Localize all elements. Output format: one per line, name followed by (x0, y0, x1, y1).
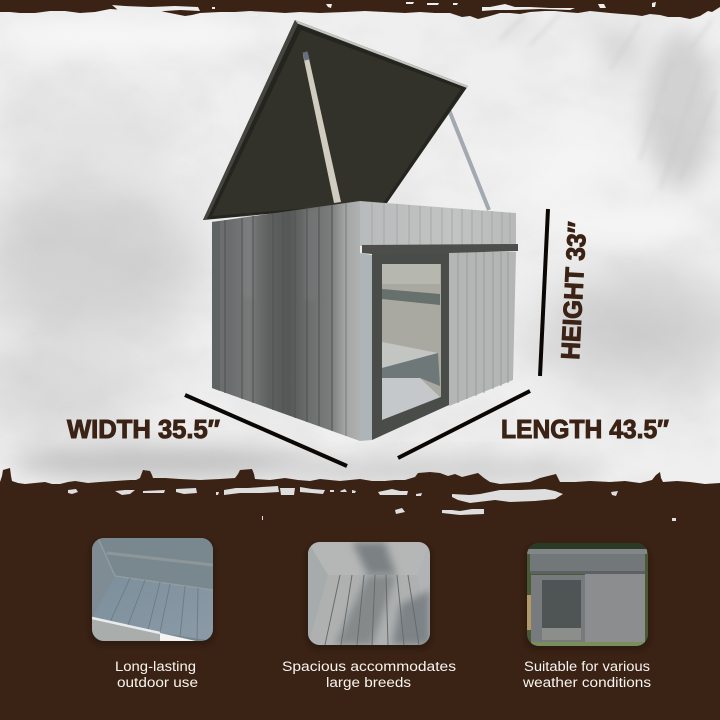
length label: LENGTH 43.5″ (501, 414, 669, 444)
caption 3: weather conditions (522, 675, 651, 690)
thumbnail 3 shadow (525, 545, 650, 650)
thumbnail 2 shadow (306, 544, 432, 649)
white torn specks, bottom (68, 486, 676, 521)
caption 2: large breeds (326, 675, 411, 690)
torn brown top border (0, 0, 720, 19)
white torn specks, top (112, 2, 656, 16)
corner strip (360, 253, 372, 441)
door frame (372, 253, 449, 440)
dimension line: length (398, 391, 530, 458)
thumbnail 3 (527, 543, 648, 646)
width label: WIDTH 35.5″ (67, 414, 220, 444)
dog house with lid open (203, 20, 518, 441)
rear lid prop (449, 110, 489, 210)
thumbnail 2 (308, 542, 430, 645)
right wall lower panel (449, 252, 516, 406)
door window glass (380, 262, 442, 424)
caption 1: Long-lasting (115, 659, 196, 674)
caption 3: Suitable for various (524, 659, 650, 674)
benefit 1: long-lasting outdoor use (90, 538, 215, 690)
benefit 2: spacious (282, 542, 456, 690)
benefit 3: weather (522, 543, 651, 690)
thumbnail 1 shadow (90, 540, 215, 645)
right wall upper panel (360, 201, 516, 246)
height label: HEIGHT 33″ (555, 221, 592, 360)
torn brown bottom panel (0, 468, 720, 720)
brush streaks, upper right (500, 14, 716, 190)
dark horizontal trim (362, 244, 518, 254)
dimension line: width (185, 395, 347, 466)
caption 2: Spacious accommodates (282, 659, 456, 674)
front lid prop (303, 54, 341, 203)
open lid (203, 20, 468, 220)
dimension line: height (540, 209, 548, 376)
thumbnail 1 (92, 538, 213, 641)
left wall with planks (212, 201, 360, 441)
textured concrete background (0, 0, 720, 500)
caption 1: outdoor use (117, 675, 198, 690)
